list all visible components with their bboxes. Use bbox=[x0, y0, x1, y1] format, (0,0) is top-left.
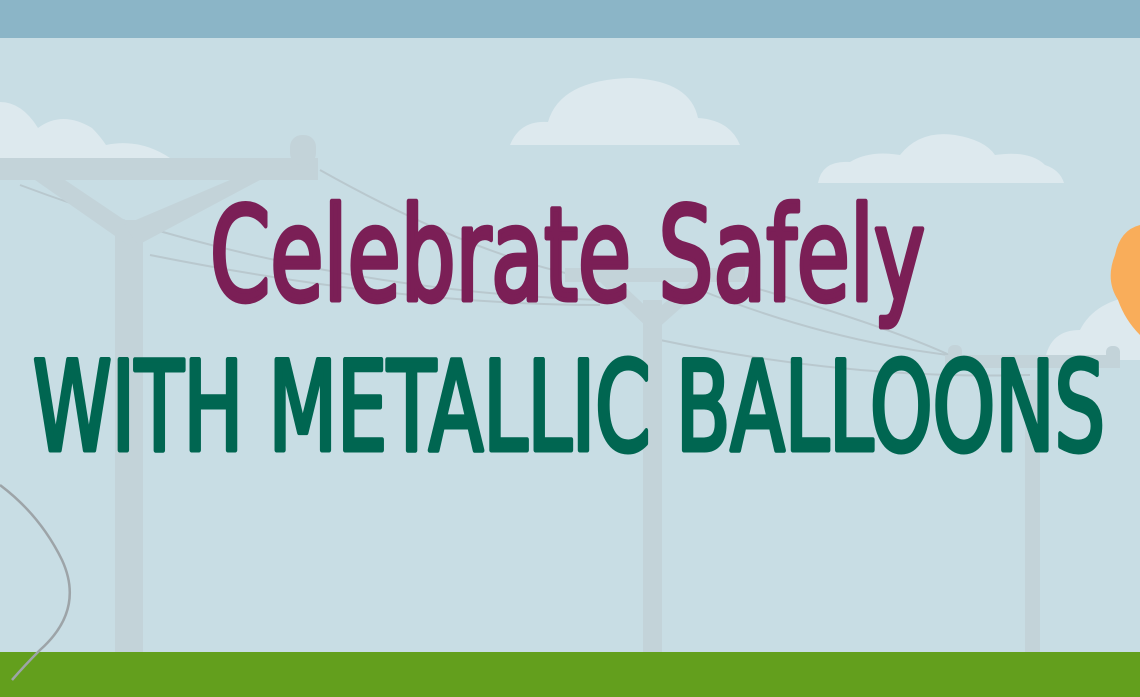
balloon string bbox=[0, 485, 70, 680]
balloon (orange, right edge) bbox=[1111, 225, 1140, 335]
pole 1 bbox=[0, 135, 318, 652]
grass bbox=[0, 652, 1140, 697]
pole 2 bbox=[565, 268, 745, 652]
top band bbox=[0, 0, 1140, 38]
clouds bbox=[0, 78, 1140, 360]
pole 3 bbox=[945, 345, 1120, 652]
wires bbox=[20, 170, 1030, 376]
